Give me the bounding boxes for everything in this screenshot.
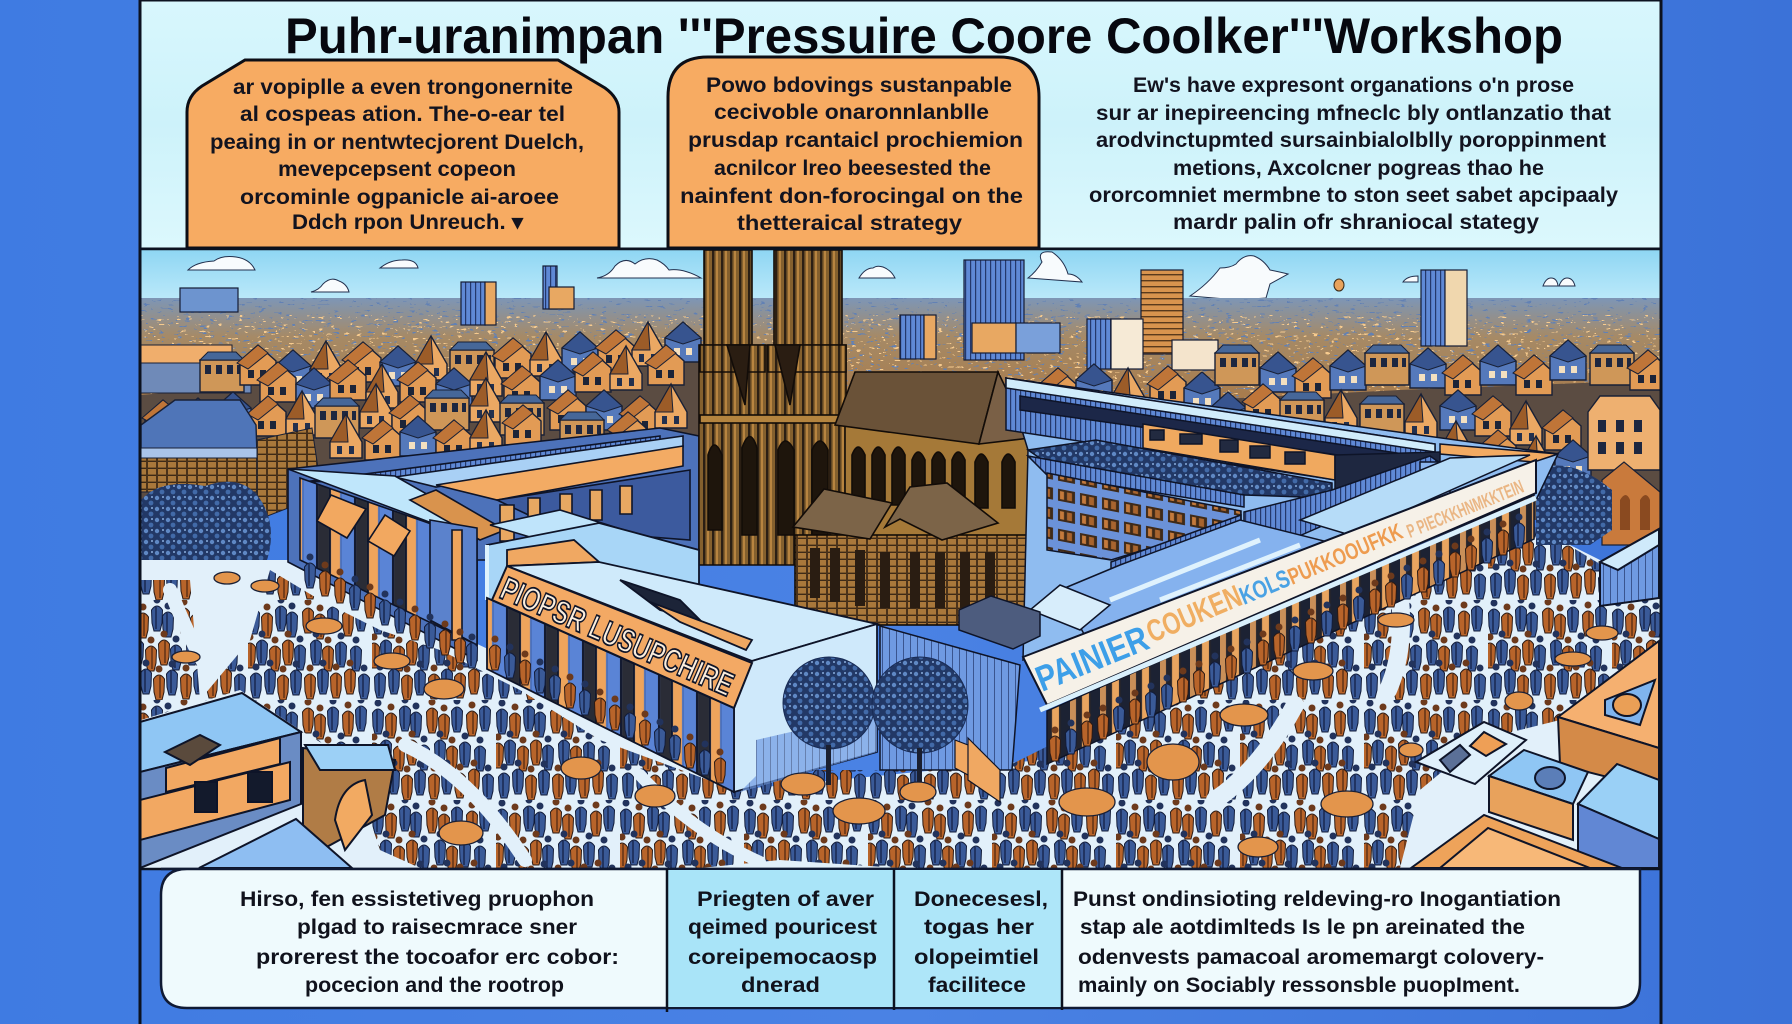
- callout: centre orange box: acnilcor lreo beesested the: [714, 157, 991, 180]
- clouds: [188, 252, 1575, 300]
- banner: right courtyard: KOLS: [1235, 564, 1294, 611]
- callout: centre orange box: thetteraical strategy: [737, 212, 962, 235]
- caption cell 4: stap ale aotdimlteds Is le pn areinated the: [1080, 916, 1525, 939]
- text block: right intro: [1089, 74, 1618, 234]
- crowds: [141, 510, 1660, 868]
- caption cell 2: Priegten of aver: [697, 888, 874, 911]
- caption cell 3: olopeimtiel: [914, 946, 1039, 969]
- text block: right intro: sur ar inepireencing mfneclc bly ontlanzatio that: [1096, 102, 1611, 125]
- people along building bases: [304, 514, 1524, 783]
- illustration: Dutch city workshop scene: [140, 249, 1666, 869]
- banner: right courtyard: COUKEN: [1141, 578, 1247, 649]
- text block: right intro: metions, Axcolcner pogreas thao he: [1173, 157, 1544, 180]
- caption cell 4: Punst ondinsioting reldeving-ro Inogantiation: [1073, 888, 1561, 911]
- caption cell 1: plgad to raisecmrace sner: [297, 916, 577, 939]
- caption cell 4: mainly on Sociably ressonsble puopIment.: [1078, 974, 1520, 997]
- cathedral towers: [699, 250, 846, 565]
- plaza ground: [141, 530, 1660, 868]
- caption cell 3: [894, 870, 1062, 1007]
- orange hoardings: [955, 738, 1000, 802]
- panel: bottom captions: [161, 869, 1640, 1012]
- banner: right courtyard: PAINIER: [1030, 617, 1154, 699]
- transept: [793, 483, 1027, 625]
- caption cell 4: [1073, 888, 1561, 997]
- banner: left hall: PIOPSR LUSUPCHIRE: [495, 569, 739, 703]
- callout: centre orange box: [668, 57, 1039, 248]
- banner: left hall: [492, 566, 752, 708]
- tree pair: [783, 657, 968, 753]
- foliage: left trees: [142, 482, 271, 560]
- text block: right intro: mardr palin ofr shraniocal stategy: [1173, 211, 1539, 234]
- caption cell 4: odenvests pamacoal aromemargt colovery-: [1078, 946, 1544, 969]
- callout: centre orange box: Powo bdovings sustanpable: [706, 74, 1012, 97]
- courtyard building: [1006, 378, 1558, 660]
- banner: right courtyard: [1023, 460, 1536, 710]
- ribbed wall under courtyard: [880, 626, 1020, 770]
- caption cell 1: pocecion and the rootrop: [305, 974, 564, 997]
- callout: left orange box: al cospeas ation. The-o-ear tel: [240, 103, 565, 126]
- foliage: right courtyard trees: [1536, 466, 1612, 545]
- callout: centre orange box: nainfent don-forocingal on the: [680, 185, 1023, 208]
- caption cell 3: Donecesesl,: [914, 888, 1048, 911]
- building: central hall: [487, 523, 877, 792]
- callout: left orange box: orcominle ogpanicle ai-aroee: [240, 186, 559, 209]
- building: left wing: [288, 428, 720, 660]
- sky: [142, 250, 1660, 298]
- plaza walkways: [170, 565, 1401, 862]
- banner: right courtyard: P PIECKKHNMKKTEIN: [1404, 477, 1527, 543]
- mid-distance rooftops left: [141, 322, 701, 520]
- sun dot: [1334, 279, 1344, 291]
- caption cell 3: facilitece: [928, 974, 1026, 997]
- banner: right courtyard: PUKKOOUFKK: [1284, 518, 1407, 590]
- caption cell 2: [667, 870, 894, 1007]
- caption cell 1: Hirso, fen essistetiveg pruophon: [240, 888, 594, 911]
- callout: centre orange box: cecivoble onaronnlanblle: [714, 101, 989, 124]
- tree trunks: [826, 745, 922, 788]
- far city texture: [142, 298, 1660, 398]
- mid-distance rooftops right: [1037, 340, 1666, 545]
- facade: [487, 598, 734, 792]
- text block: right intro: Ew's have expresont organations o'n prose: [1133, 74, 1574, 97]
- skyline towers: [180, 260, 1467, 370]
- cathedral roof: [835, 372, 1030, 444]
- caption cell 2: qeimed pouricest: [688, 916, 877, 939]
- foreground buildings: bottom right: [1411, 529, 1659, 868]
- foreground building: bottom left: [140, 693, 395, 868]
- caption cell 1: prorerest the tocoafor erc cobor:: [256, 946, 619, 969]
- caption cell 1: [240, 888, 619, 997]
- text block: right intro: arodvinctupmted sursainbialolblly poroppinment: [1096, 129, 1606, 152]
- text block: right intro: ororcomniet mermbne to ston seet sabet apcipaaly: [1089, 184, 1618, 207]
- nave: [845, 425, 1030, 540]
- callout: left orange box: ar vopiplle a even trongonernite: [233, 76, 573, 99]
- building: cathedral: [699, 250, 1030, 625]
- callout: centre orange box: prusdap rcantaicl prochiemion: [688, 129, 1023, 152]
- hvac unit: [959, 596, 1040, 649]
- caption cell 3: togas her: [924, 916, 1034, 939]
- callout: left orange box: [187, 60, 619, 248]
- panel: header: [140, 0, 1661, 249]
- caption cell 2: dnerad: [741, 974, 820, 997]
- callout: left orange box: mevepcepsent copeon: [278, 158, 516, 181]
- rooftop backing: [141, 360, 1660, 520]
- title: Puhr-uranimpan '''Pressuire Coore Coolker'''Workshop: [285, 8, 1563, 64]
- callout: left orange box: peaing in or nentwtecjorent Duelch,: [210, 131, 584, 154]
- building: right facade: [1047, 495, 1534, 764]
- caption cell 2: coreipemocaosp: [688, 946, 877, 969]
- callout: left orange box: Ddch rpon Unreuch. ▾: [292, 211, 525, 234]
- cafe tables: [172, 572, 1618, 857]
